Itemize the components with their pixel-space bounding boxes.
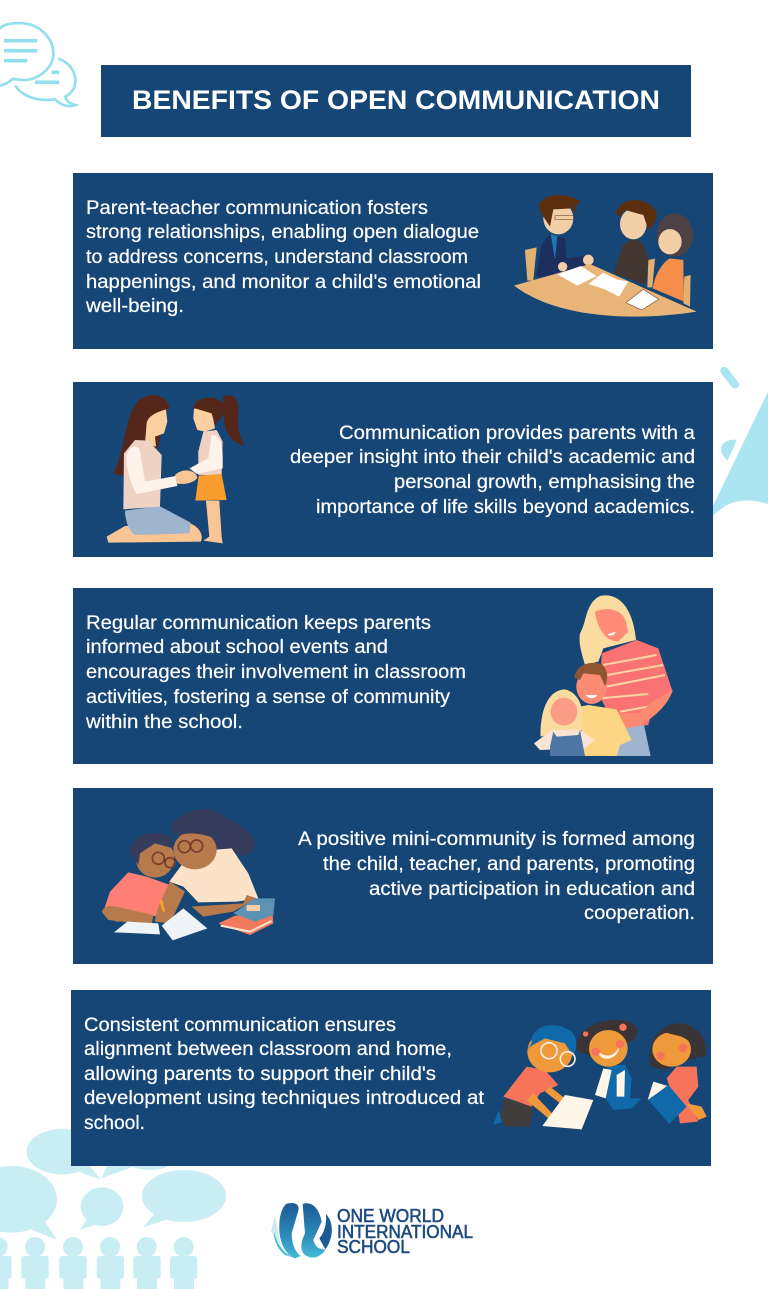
panel: mini-community (73, 788, 713, 964)
text block: Consistent communication ensures (84, 1015, 396, 1036)
text block: personal growth, emphasising the (394, 472, 695, 493)
text block: to address concerns, understand classroom (86, 247, 468, 268)
text block: deeper insight into their child's academic and (290, 447, 695, 468)
logo wordmark: SCHOOL (337, 1237, 410, 1257)
panel: strong relationships (73, 173, 713, 349)
text block (290, 423, 695, 518)
illustration: mother with two children (534, 595, 673, 756)
text block: activities, fostering a sense of community (86, 687, 451, 708)
text block: well-being. (85, 296, 184, 317)
logo wordmark (337, 1206, 473, 1257)
text block: Regular communication keeps parents (86, 613, 431, 634)
title: BENEFITS OF OPEN COMMUNICATION (132, 85, 660, 115)
text block: strong relationships, enabling open dialogue (86, 222, 479, 243)
text block: cooperation. (584, 903, 695, 924)
text block: allowing parents to support their child's (84, 1064, 436, 1085)
text block: active participation in education and (369, 879, 695, 900)
logo (271, 1203, 473, 1258)
text block (85, 198, 481, 317)
panel: insight into growth (73, 382, 713, 557)
text block: Parent-teacher communication fosters (86, 198, 428, 219)
illustration: parents and teacher at table (514, 195, 697, 317)
panel: classroom and home alignment (71, 990, 711, 1166)
decorative speech bubbles and people (0, 1129, 226, 1289)
text block: development using techniques introduced at (84, 1088, 485, 1109)
decorative megaphone (713, 365, 768, 516)
logo mark (271, 1203, 332, 1258)
icon: chat bubbles (0, 23, 75, 106)
illustration: mother and daughter (107, 395, 245, 543)
text block: encourages their involvement in classroom (86, 662, 466, 683)
text block: informed about school events and (86, 637, 388, 658)
logo wordmark: ONE WORLD (337, 1206, 444, 1226)
text block (84, 1015, 485, 1134)
logo wordmark: INTERNATIONAL (337, 1222, 473, 1242)
text block: the child, teacher, and parents, promoting (323, 854, 695, 875)
text block: Communication provides parents with a (339, 423, 695, 444)
illustration: three children playing (493, 1020, 707, 1129)
title banner (101, 65, 691, 137)
text block: within the school. (85, 712, 243, 733)
text block: A positive mini-community is formed among (298, 829, 695, 850)
text block (85, 613, 466, 733)
text block: importance of life skills beyond academics. (316, 497, 695, 518)
illustration: child and parent studying (102, 809, 275, 940)
text block: happenings, and monitor a child's emotional (86, 272, 481, 293)
text block: alignment between classroom and home, (84, 1039, 452, 1060)
text block (298, 829, 695, 924)
panel: community involvement (73, 588, 713, 764)
text block: school. (84, 1113, 145, 1134)
